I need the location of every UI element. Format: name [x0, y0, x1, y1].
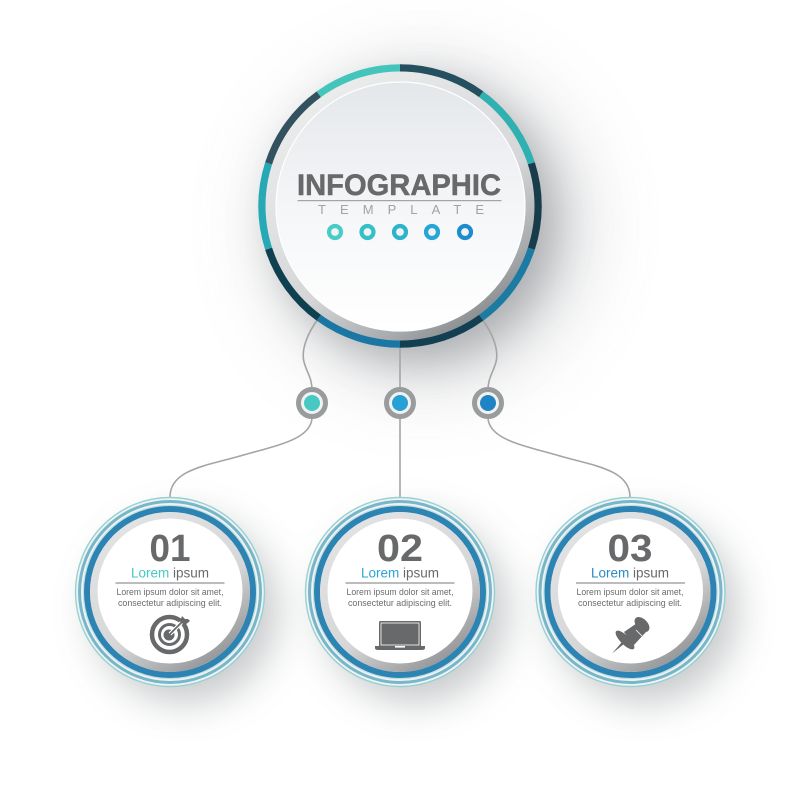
body text: Lorem ipsum dolor sit amet, [116, 587, 224, 598]
segmented outer ring [207, 13, 593, 399]
body text [576, 587, 684, 609]
node left [298, 390, 326, 416]
circle 02 [306, 498, 494, 686]
connector lines [170, 319, 630, 497]
heading: Lorem ipsum [131, 564, 209, 580]
body text [116, 587, 224, 609]
number: 02 [377, 528, 423, 570]
heading: Lorem ipsum [591, 564, 669, 580]
subtitle: TEMPLATE [318, 202, 484, 217]
number: 03 [608, 528, 652, 570]
heading: Lorem ipsum [361, 564, 439, 580]
body text: Lorem ipsum dolor sit amet, [346, 587, 454, 598]
disc [98, 518, 242, 664]
number: 01 [150, 528, 190, 570]
bevel [90, 512, 250, 672]
body text: consectetur adipiscing elit. [348, 598, 452, 609]
divider [346, 582, 454, 584]
body text [346, 587, 454, 609]
main circle [207, 13, 593, 399]
icon: push pin [612, 614, 652, 654]
circle 03 [536, 498, 725, 686]
rings [306, 498, 494, 686]
rings [536, 498, 725, 686]
dot row [329, 226, 471, 238]
divider [576, 582, 685, 584]
disc [328, 518, 472, 664]
icon: laptop [375, 621, 425, 650]
body text: consectetur adipiscing elit. [578, 598, 682, 609]
title divider [298, 200, 502, 201]
inner disc [276, 82, 525, 331]
main circle shadow [275, 75, 575, 375]
node right [474, 390, 502, 416]
small circle shadows [93, 518, 737, 702]
title: INFOGRAPHIC [297, 169, 501, 202]
divider [116, 582, 224, 584]
bevel [550, 512, 710, 672]
icon: target [152, 616, 190, 652]
node centre [386, 390, 414, 416]
body text: Lorem ipsum dolor sit amet, [576, 587, 684, 598]
circle 01 [76, 498, 264, 686]
body text: consectetur adipiscing elit. [118, 598, 222, 609]
rings [76, 498, 264, 686]
bevel ring [266, 72, 534, 340]
disc [558, 518, 703, 664]
bevel [320, 512, 480, 672]
